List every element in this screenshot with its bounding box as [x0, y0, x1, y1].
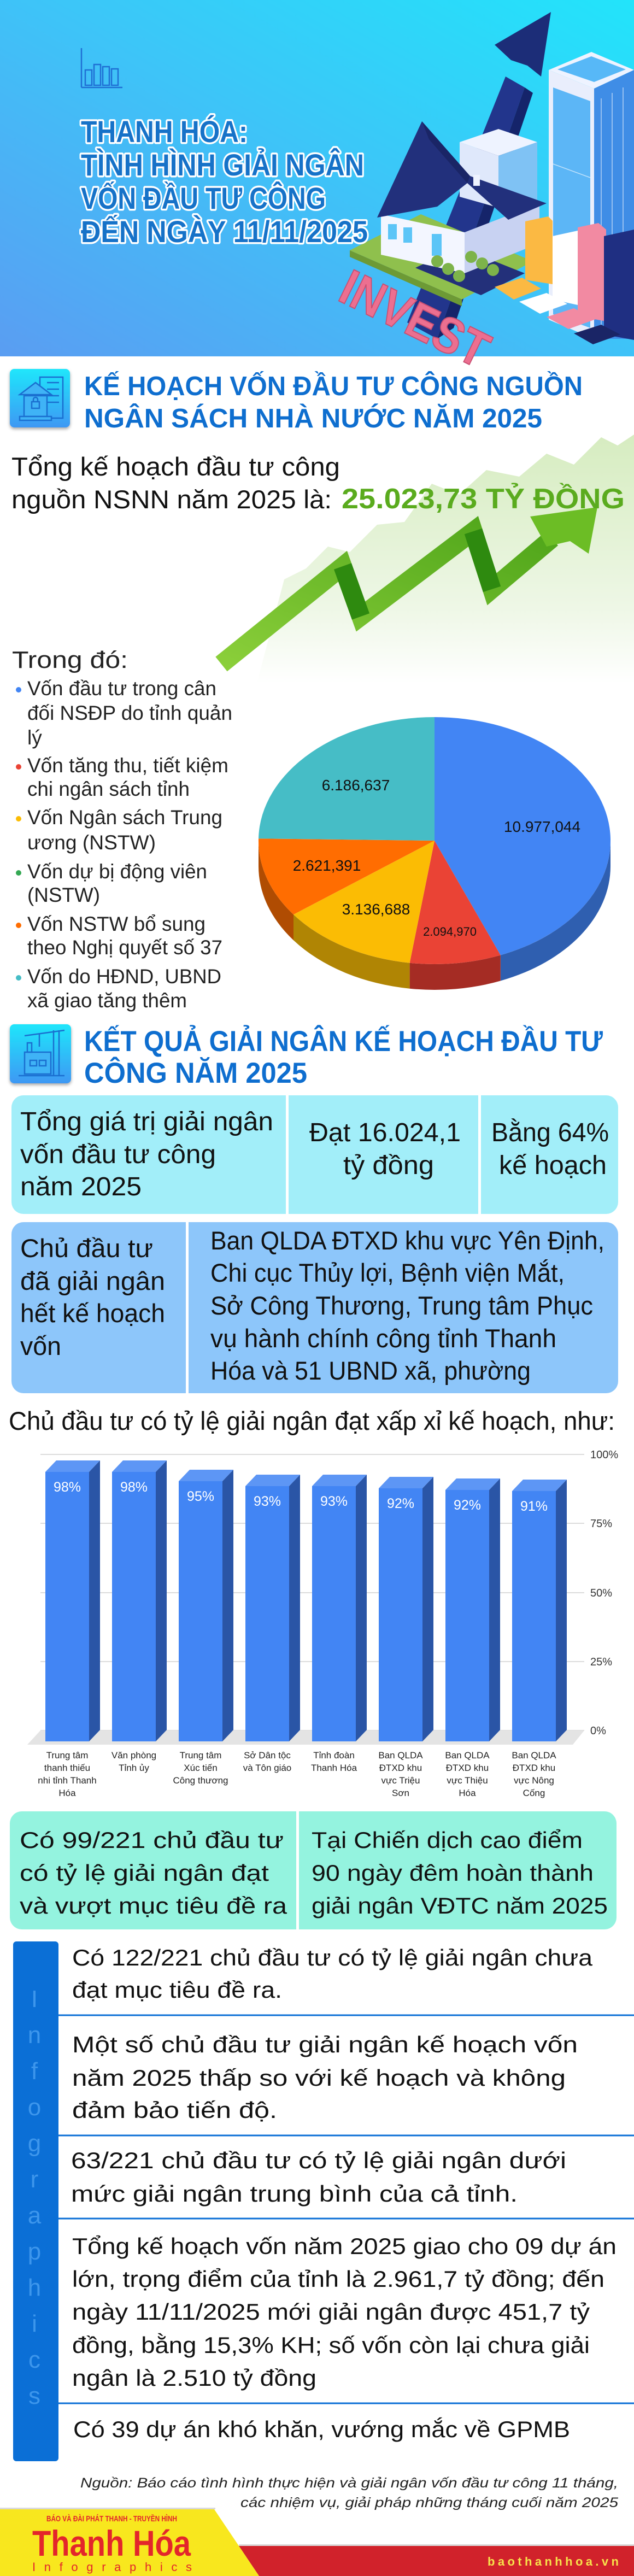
sidebar: Infographics vertical	[13, 1941, 58, 2461]
pie chart: 3.136,688	[342, 901, 410, 918]
highlight number: 25.023,73 TỶ ĐỒNG	[342, 483, 625, 515]
bar labels: Tỉnh ủy	[119, 1763, 149, 1773]
footer	[0, 2508, 634, 2576]
bar chart: disbursement rates: 100%	[590, 1449, 618, 1461]
title	[81, 114, 368, 249]
bar labels: thanh thiếu	[44, 1763, 90, 1773]
sidebar: Infographics vertical: h	[28, 2274, 41, 2301]
bar labels	[38, 1750, 556, 1798]
sidebar: Infographics vertical: c	[28, 2346, 40, 2373]
heading text	[84, 371, 583, 433]
legend: đối NSĐP do tỉnh quản	[27, 702, 232, 724]
title: THANH HÓA:	[81, 114, 248, 149]
table: investors fully disbursed: Chi cục Thủy lợi, Bệnh viện Mắt,	[210, 1258, 565, 1287]
sidebar: Infographics vertical: p	[28, 2238, 41, 2265]
small building	[460, 129, 537, 156]
total plan text	[11, 452, 625, 515]
panel: issues list: Một số chủ đầu tư giải ngân kế hoạch vốn	[72, 2032, 578, 2057]
panel: issues list: Có 122/221 chủ đầu tư có tỷ lệ giải ngân chưa	[72, 1945, 593, 1970]
title: VỐN ĐẦU TƯ CÔNG	[81, 181, 326, 215]
legend: Vốn do HĐND, UBND	[27, 965, 221, 988]
bar labels: vực Nông	[514, 1775, 554, 1786]
title: ĐẾN NGÀY 11/11/2025	[81, 214, 368, 249]
total plan text: nguồn NSNN năm 2025 là:	[11, 485, 332, 514]
table: total disbursement: Đạt 16.024,1	[309, 1118, 461, 1147]
text: INVEST: INVEST	[331, 259, 498, 379]
pie chart: 2.094,970	[423, 925, 477, 938]
tiles	[495, 278, 541, 300]
sidebar: Infographics vertical: i	[32, 2310, 37, 2337]
heading text: CÔNG NĂM 2025	[84, 1056, 307, 1089]
growth bars	[525, 216, 553, 284]
panel: issues list: Tổng kế hoạch vốn năm 2025 giao cho 09 dự án	[72, 2233, 617, 2259]
logo: Thanh Hóa	[32, 2523, 191, 2563]
sidebar: Infographics vertical: o	[28, 2094, 41, 2121]
table: investors fully disbursed	[11, 1222, 618, 1393]
icon: small bar chart outline	[81, 48, 122, 87]
arrow up	[407, 77, 525, 339]
panel: issues list	[13, 1941, 634, 2461]
logo: Infographics	[32, 2560, 192, 2574]
bar labels: vực Triệu	[381, 1775, 420, 1786]
bar chart: disbursement rates: 92%	[387, 1496, 414, 1511]
panel: issues list: Có 39 dự án khó khăn, vướng mắc về GPMB	[73, 2416, 570, 2442]
logo	[32, 2514, 192, 2574]
pie chart: 6.186,637	[322, 777, 390, 794]
bar chart: disbursement rates: 25%	[590, 1656, 612, 1668]
legend: Vốn Ngân sách Trung	[27, 806, 222, 829]
icon: bank with document	[10, 369, 70, 427]
bar labels: vực Thiệu	[447, 1775, 488, 1786]
table: achievers and campaign: Có 99/221 chủ đầu tư	[20, 1827, 284, 1853]
legend: (NSTW)	[27, 884, 100, 906]
bar labels: ĐTXD khu	[513, 1763, 555, 1773]
sidebar: Infographics vertical: s	[28, 2383, 40, 2409]
table: investors fully disbursed: Chủ đầu tư	[20, 1234, 153, 1263]
lawn	[350, 214, 533, 300]
panel: issues list: lớn, trọng điểm của tỉnh là 2.961,7 tỷ đồng; đến	[72, 2266, 604, 2292]
bar labels: và Tôn giáo	[243, 1763, 291, 1773]
panel: issues list: ngân là 2.510 tỷ đồng	[72, 2365, 316, 2391]
panel: issues list: đạt mục tiêu đề ra.	[72, 1977, 282, 2003]
table: achievers and campaign: Tại Chiến dịch cao điểm	[312, 1827, 583, 1853]
legend: chi ngân sách tỉnh	[27, 778, 190, 800]
table: achievers and campaign: và vượt mục tiêu đề ra	[20, 1893, 287, 1918]
heading text	[84, 1024, 603, 1089]
bar chart: disbursement rates: 0%	[590, 1725, 606, 1737]
legend: xã giao tăng thêm	[27, 989, 187, 1012]
panel: issues list: mức giải ngân trung bình của cả tỉnh.	[71, 2181, 518, 2207]
logo: BÁO VÀ ĐÀI PHÁT THANH - TRUYỀN HÌNH	[46, 2514, 177, 2524]
legend: Trong đó:	[12, 647, 128, 673]
table: achievers and campaign	[10, 1811, 617, 1929]
bar labels: nhi tỉnh Thanh	[38, 1775, 97, 1786]
bar labels: Sơn	[392, 1788, 409, 1798]
table: total disbursement: năm 2025	[20, 1172, 142, 1201]
table: achievers and campaign: 90 ngày đêm hoàn thành	[312, 1860, 594, 1886]
illustration: investment city	[331, 12, 634, 379]
section heading 2	[10, 1024, 603, 1089]
source note	[80, 2475, 618, 2510]
panel: issues list: năm 2025 thấp so với kế hoạch và không	[72, 2065, 566, 2091]
table: investors fully disbursed: hết kế hoạch	[20, 1299, 165, 1328]
bar labels: Tỉnh đoàn	[313, 1750, 355, 1761]
table: investors fully disbursed: Sở Công Thương, Trung tâm Phục	[210, 1291, 593, 1320]
bars	[45, 1460, 567, 1741]
table: total disbursement	[11, 1095, 618, 1214]
table: investors fully disbursed: Ban QLDA ĐTXD khu vực Yên Định,	[210, 1226, 604, 1255]
table: achievers and campaign: có tỷ lệ giải ngân đạt	[20, 1860, 269, 1886]
bar labels: ĐTXD khu	[379, 1763, 422, 1773]
bar labels: Trung tâm	[180, 1750, 221, 1761]
sidebar: Infographics vertical: r	[31, 2166, 38, 2193]
bar chart: disbursement rates: 50%	[590, 1587, 612, 1599]
bar labels: ĐTXD khu	[446, 1763, 489, 1773]
bushes	[431, 251, 499, 282]
bar labels: Thanh Hóa	[311, 1763, 357, 1773]
bar labels: Hóa	[58, 1788, 76, 1798]
bar labels: Ban QLDA	[378, 1750, 423, 1761]
legend: lý	[27, 726, 42, 749]
bar labels: Hóa	[459, 1788, 476, 1798]
bar chart: disbursement rates	[27, 1449, 618, 1798]
sidebar: Infographics vertical: n	[28, 2022, 41, 2049]
bar chart: disbursement rates: 75%	[590, 1518, 612, 1530]
title: TÌNH HÌNH GIẢI NGÂN	[81, 148, 364, 182]
pie chart	[259, 717, 610, 990]
tall tower	[549, 52, 634, 89]
bar labels: Công thương	[173, 1775, 228, 1786]
roof	[377, 121, 547, 220]
table: investors fully disbursed: vụ hành chính công tỉnh Thanh	[210, 1324, 556, 1353]
table: total disbursement: Tổng giá trị giải ngân	[20, 1107, 273, 1136]
bar labels: Xúc tiến	[184, 1763, 218, 1773]
sidebar: Infographics vertical: a	[28, 2202, 42, 2229]
icon: crane and factory	[10, 1024, 71, 1083]
legend: Vốn đầu tư trong cân	[27, 677, 216, 700]
legend	[12, 647, 232, 1012]
table: investors fully disbursed: vốn	[20, 1331, 61, 1360]
bar labels: Ban QLDA	[445, 1750, 490, 1761]
table: investors fully disbursed: đã giải ngân	[20, 1266, 165, 1295]
legend: Vốn NSTW bổ sung	[27, 913, 206, 935]
panel: issues list: đảm bảo tiến độ.	[72, 2097, 277, 2123]
section heading 1	[10, 369, 583, 433]
heading text: NGÂN SÁCH NHÀ NƯỚC NĂM 2025	[84, 403, 542, 433]
hero banner	[0, 0, 634, 379]
bar chart: disbursement rates: 93%	[254, 1494, 281, 1509]
table: total disbursement: Bằng 64%	[491, 1118, 609, 1147]
bar chart: disbursement rates: 93%	[320, 1494, 348, 1509]
pie chart: 2.621,391	[293, 857, 361, 874]
table: investors fully disbursed: Hóa và 51 UBND xã, phường	[210, 1356, 531, 1385]
bar labels: Sở Dân tộc	[244, 1750, 291, 1761]
total plan text: Tổng kế hoạch đầu tư công	[11, 452, 340, 481]
source note: Nguồn: Báo cáo tình hình thực hiện và giải ngân vốn đầu tư công 11 tháng,	[80, 2475, 618, 2491]
bar chart: disbursement rates: 98%	[54, 1480, 81, 1495]
bar labels: Trung tâm	[46, 1750, 88, 1761]
heading text: KẾ HOẠCH VỐN ĐẦU TƯ CÔNG NGUỒN	[84, 371, 583, 401]
legend: ương (NSTW)	[27, 831, 156, 854]
house walls	[381, 214, 465, 273]
panel: issues list: ngày 11/11/2025 mới giải ngân được 451,7 tỷ	[72, 2299, 590, 2325]
website: baothanhhoa.vn	[488, 2555, 619, 2568]
panel: issues list: 63/221 chủ đầu tư có tỷ lệ giải ngân dưới	[71, 2147, 566, 2173]
legend: Vốn tăng thu, tiết kiệm	[27, 754, 228, 777]
chart caption: Chủ đầu tư có tỷ lệ giải ngân đạt xấp xỉ kế hoạch, như:	[9, 1406, 615, 1435]
legend: theo Nghị quyết số 37	[27, 936, 222, 959]
bar labels: Ban QLDA	[512, 1750, 556, 1761]
sidebar: Infographics vertical: g	[28, 2130, 41, 2157]
sidebar: Infographics vertical: f	[31, 2058, 38, 2085]
legend: Vốn dự bị động viên	[27, 860, 207, 883]
table: achievers and campaign: giải ngân VĐTC năm 2025	[312, 1893, 608, 1918]
bar chart: disbursement rates: 92%	[454, 1498, 481, 1513]
table: total disbursement: tỷ đồng	[343, 1151, 434, 1180]
pie chart: 10.977,044	[504, 818, 580, 835]
bar labels: Cống	[523, 1788, 545, 1798]
panel: issues list: đồng, bằng 15,3% KH; số vốn còn lại chưa giải	[72, 2332, 590, 2358]
table: total disbursement: kế hoạch	[499, 1151, 607, 1180]
table: total disbursement: vốn đầu tư công	[20, 1140, 216, 1169]
bar chart: disbursement rates: 95%	[187, 1489, 214, 1504]
bar labels: Văn phòng	[111, 1750, 156, 1761]
bar chart: disbursement rates: 91%	[520, 1499, 548, 1514]
background: green growth arrow	[221, 435, 634, 683]
source note: các nhiệm vụ, giải pháp những tháng cuối năm 2025	[240, 2495, 618, 2510]
sidebar: Infographics vertical: I	[31, 1986, 38, 2012]
bar chart: disbursement rates: 98%	[120, 1480, 148, 1495]
